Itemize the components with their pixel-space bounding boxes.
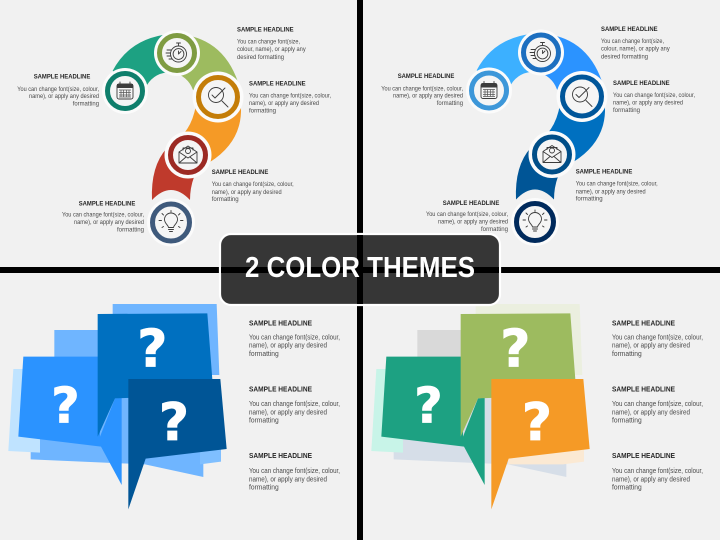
text: magnifier item <box>613 80 695 114</box>
segment: bright blue arc <box>536 34 602 100</box>
segment: orange arc <box>185 105 241 162</box>
question mark: left: ? <box>414 377 443 434</box>
text blocks: bottom left panel <box>249 321 340 492</box>
text: envelope item: name), or apply any desired <box>212 189 282 196</box>
text: calendar item: SAMPLE HEADLINE <box>398 73 455 80</box>
text: envelope item: formatting <box>576 196 603 203</box>
text: item 2: formatting <box>249 418 279 425</box>
icon: envelope circle <box>528 131 576 178</box>
text: item 2 <box>249 386 340 425</box>
speech bubble: right <box>491 379 590 509</box>
text: stopwatch item <box>601 26 670 60</box>
text: item 3: You can change font(size, colour, <box>612 468 703 475</box>
text: magnifier item: name), or apply any desired <box>249 100 319 107</box>
text: stopwatch item: colour, name), or apply any <box>237 46 306 53</box>
text: calendar item: SAMPLE HEADLINE <box>34 74 91 80</box>
question mark: right: ? <box>522 393 552 453</box>
panel: bottom right background <box>363 273 720 540</box>
text: item 3: name), or apply any desired <box>249 476 327 483</box>
text: stopwatch item: You can change font(size, <box>601 38 664 45</box>
text: bulb item: name), or apply any desired <box>74 219 144 226</box>
speech bubble: right <box>128 379 227 509</box>
text: stopwatch item: colour, name), or apply any <box>601 46 670 53</box>
text: calendar item: formatting <box>437 100 463 107</box>
segment: teal arc <box>113 34 172 91</box>
icon: light bulb circle <box>511 198 559 246</box>
text: item 2: name), or apply any desired <box>249 409 327 416</box>
panel: top right background <box>363 0 720 267</box>
text: item 2: formatting <box>612 418 642 425</box>
text: bulb item <box>62 200 144 234</box>
text: magnifier item: You can change font(size, colour, <box>613 92 695 99</box>
segment: red arc <box>152 148 194 200</box>
text: item 2: name), or apply any desired <box>612 409 690 416</box>
text: item 1: name), or apply any desired <box>249 343 327 350</box>
text: envelope item: name), or apply any desired <box>576 188 646 195</box>
panel: bottom left background <box>0 273 357 540</box>
text: item 1: formatting <box>612 351 642 358</box>
text: magnifier item: SAMPLE HEADLINE <box>613 80 670 87</box>
text: item 1 <box>249 321 340 358</box>
panel: speech bubbles, blue theme <box>8 304 227 509</box>
speech bubble: middle <box>98 313 212 437</box>
text: bulb item: You can change font(size, colour, <box>62 212 144 218</box>
text: magnifier item: formatting <box>613 107 640 114</box>
text: bulb item: formatting <box>117 226 144 234</box>
text: magnifier item: formatting <box>249 108 276 114</box>
icon: envelope circle <box>164 132 212 178</box>
text: item 2: SAMPLE HEADLINE <box>612 386 675 393</box>
text: stopwatch item <box>237 26 306 61</box>
text: item 1: You can change font(size, colour, <box>249 334 340 341</box>
text: calendar item: name), or apply any desired <box>29 93 99 100</box>
text: stopwatch item: desired formatting <box>601 53 648 60</box>
icon: magnifier circle <box>192 72 244 122</box>
question mark: left: ? <box>51 377 80 434</box>
icon: calendar circle <box>102 68 148 114</box>
text: envelope item <box>212 169 294 203</box>
text: envelope item: formatting <box>212 196 239 203</box>
icon: magnifier circle <box>556 71 608 122</box>
text: bulb item: You can change font(size, colour, <box>426 211 508 218</box>
panel: question mark, blue theme <box>466 30 608 246</box>
text: item 2: SAMPLE HEADLINE <box>249 386 312 393</box>
text: calendar item: You can change font(size, colour, <box>17 86 99 93</box>
text: item 3: SAMPLE HEADLINE <box>612 453 675 460</box>
text: bulb item: name), or apply any desired <box>438 218 508 225</box>
icon: light bulb circle <box>147 198 195 246</box>
text: bulb item: SAMPLE HEADLINE <box>443 200 500 207</box>
text: item 1: SAMPLE HEADLINE <box>249 321 312 328</box>
text: envelope item: SAMPLE HEADLINE <box>212 169 269 176</box>
text: item 1: You can change font(size, colour, <box>612 334 703 341</box>
text: item 3: formatting <box>249 485 279 492</box>
segment: light blue arc <box>477 34 536 90</box>
icon: stopwatch circle <box>154 30 200 76</box>
text: envelope item: You can change font(size, colour, <box>212 181 294 188</box>
text: stopwatch item: desired formatting <box>237 54 284 61</box>
text: item 1: SAMPLE HEADLINE <box>612 321 675 328</box>
panel: question mark, multicolor theme <box>102 30 244 246</box>
text: item 1 <box>612 321 703 358</box>
panel: top left background <box>0 0 357 267</box>
text: item 2: You can change font(size, colour, <box>249 401 340 408</box>
text: calendar item: You can change font(size, colour, <box>381 85 463 92</box>
text blocks: top left panel <box>17 26 331 234</box>
text: calendar item <box>17 74 99 108</box>
question mark: middle: ? <box>500 320 530 380</box>
text: magnifier item <box>249 80 331 114</box>
text: calendar item: name), or apply any desired <box>393 93 463 100</box>
question mark: right: ? <box>159 393 189 453</box>
text: item 1: formatting <box>249 351 279 358</box>
text: envelope item <box>576 169 658 203</box>
text: item 3 <box>612 453 703 492</box>
text: item 2 <box>612 386 703 425</box>
panel: speech bubbles, multicolor theme <box>371 304 590 509</box>
speech bubble: middle <box>461 313 575 437</box>
text: bulb item: formatting <box>481 226 508 233</box>
text: item 3: SAMPLE HEADLINE <box>249 453 312 460</box>
question mark: middle: ? <box>137 320 167 380</box>
text: bulb item <box>426 200 508 233</box>
segment: green arc <box>172 34 238 100</box>
text: item 3: name), or apply any desired <box>612 476 690 483</box>
text: item 2: You can change font(size, colour, <box>612 401 703 408</box>
text: stopwatch item: SAMPLE HEADLINE <box>237 26 294 34</box>
text: magnifier item: name), or apply any desired <box>613 100 683 107</box>
back shapes <box>371 304 584 477</box>
text: envelope item: You can change font(size, colour, <box>576 181 658 188</box>
text: magnifier item: You can change font(size, colour, <box>249 92 331 100</box>
text: item 1: name), or apply any desired <box>612 343 690 350</box>
text: calendar item: formatting <box>73 100 99 108</box>
text: envelope item: SAMPLE HEADLINE <box>576 169 633 176</box>
back shapes <box>8 304 221 477</box>
text: stopwatch item: You can change font(size, <box>237 38 300 46</box>
text: item 3: formatting <box>612 485 642 492</box>
speech bubble: left <box>18 357 122 485</box>
text: item 3 <box>249 453 340 492</box>
speech bubble: left <box>381 357 485 485</box>
badge: 2 color themes <box>220 234 500 305</box>
text: calendar item <box>381 73 463 107</box>
text: bulb item: SAMPLE HEADLINE <box>79 200 136 208</box>
title: 2 COLOR THEMES <box>245 252 475 284</box>
text: item 3: You can change font(size, colour, <box>249 468 340 475</box>
text blocks: bottom right panel <box>612 321 703 492</box>
icon: stopwatch circle <box>518 30 564 76</box>
segment: medium blue arc <box>549 104 605 162</box>
text: stopwatch item: SAMPLE HEADLINE <box>601 26 658 33</box>
text: magnifier item: SAMPLE HEADLINE <box>249 80 306 88</box>
icon: calendar circle <box>466 68 512 114</box>
text blocks: top right panel <box>381 26 695 233</box>
segment: dark blue arc <box>516 148 558 200</box>
